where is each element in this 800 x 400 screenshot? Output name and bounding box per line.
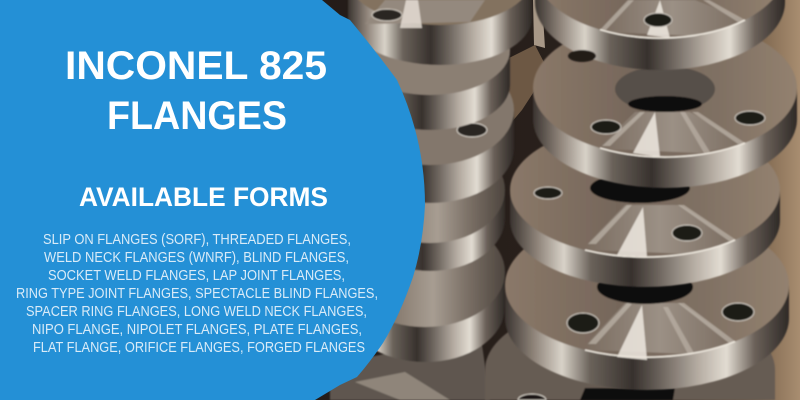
title: [65, 44, 327, 138]
photo: top right flange: [535, 0, 785, 70]
list of flange forms: RING TYPE JOINT FLANGES, SPECTACLE BLIND FLANGES,: [16, 286, 378, 302]
photo: left flange stack: [330, 0, 532, 400]
title: FLANGES: [107, 94, 287, 138]
list of flange forms: WELD NECK FLANGES (WNRF), BLIND FLANGES,: [44, 250, 349, 266]
list of flange forms: SPACER RING FLANGES, LONG WELD NECK FLANGES,: [26, 304, 367, 320]
photo: upper right flange: [533, 19, 797, 188]
photo: lower right flange: [505, 213, 789, 390]
list of flange forms: SOCKET WELD FLANGES, LAP JOINT FLANGES,: [48, 268, 345, 284]
list of flange forms: [16, 232, 378, 356]
list of flange forms: NIPO FLANGE, NIPOLET FLANGES, PLATE FLANGES,: [32, 322, 362, 338]
list of flange forms: FLAT FLANGE, ORIFICE FLANGES, FORGED FLANGES: [33, 340, 365, 356]
subheading: available forms: AVAILABLE FORMS: [79, 182, 328, 212]
blue panel: [0, 0, 425, 400]
photo: bottom right flange: [485, 300, 775, 400]
photo: middle right flange: [510, 123, 780, 287]
title: INCONEL 825: [65, 44, 327, 88]
list of flange forms: SLIP ON FLANGES (SORF), THREADED FLANGES,: [43, 232, 351, 248]
